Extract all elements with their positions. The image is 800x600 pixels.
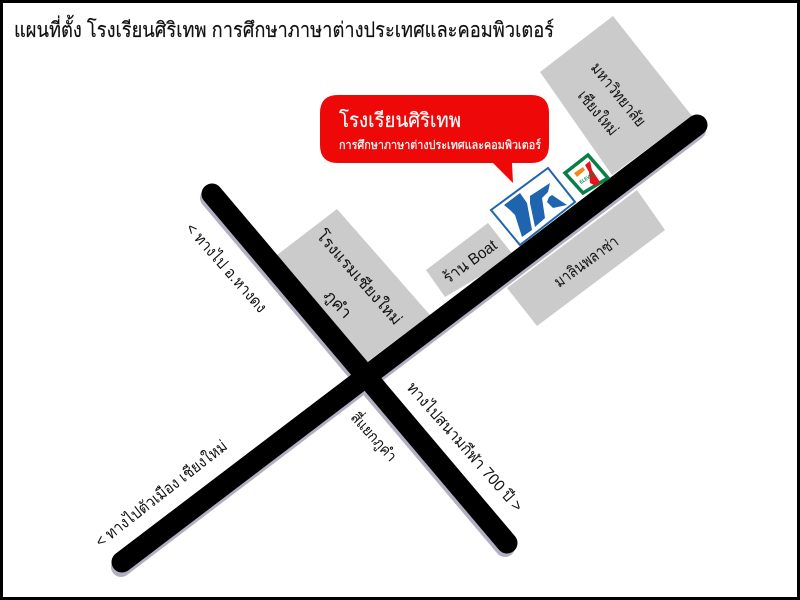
icon: 7-Eleven logo	[565, 155, 608, 193]
road: cross street	[212, 194, 507, 543]
block: hotel: ภูคำ	[319, 287, 354, 323]
callout: โรงเรียนศิริเทพ	[339, 109, 461, 132]
label: to 700 Year Stadium: ทางไปสนามกีฬา 700 ปี >	[403, 378, 527, 515]
block: Malin Plaza: มาลินพลาซ่า	[551, 233, 622, 291]
title: แผนที่ตั้ง โรงเรียนศิริเทพ การศึกษาภาษาต่างประเทศและคอมพิวเตอร์	[14, 15, 554, 42]
label: to city: < ทางไปตัวเมือง เชียงใหม่	[91, 436, 231, 551]
callout	[320, 95, 549, 183]
icon: 7-Eleven logo: ELEVEN	[579, 171, 597, 186]
block: university	[540, 16, 692, 175]
block: Boat shop: ร้าน Boat	[440, 236, 501, 287]
block: hotel: โรงแรมเชียงใหม่	[312, 226, 406, 329]
label: Phu Kham intersection: สี่แยกภูคำ	[347, 407, 402, 465]
road: diagonal main	[122, 125, 697, 562]
block: university: เชียงใหม่	[574, 86, 623, 139]
block: Malin Plaza	[507, 190, 665, 326]
road shadows	[121, 130, 696, 567]
icon: school logo	[491, 168, 575, 245]
label: to Hang Dong: < ทางไป อ.หางดง	[182, 219, 271, 316]
block: hotel	[277, 209, 430, 362]
block: university: มหาวิทยาลัย	[587, 60, 649, 130]
callout: การศึกษาภาษาต่างประเทศและคอมพิวเตอร์	[339, 138, 541, 152]
block: Boat shop	[426, 223, 514, 297]
